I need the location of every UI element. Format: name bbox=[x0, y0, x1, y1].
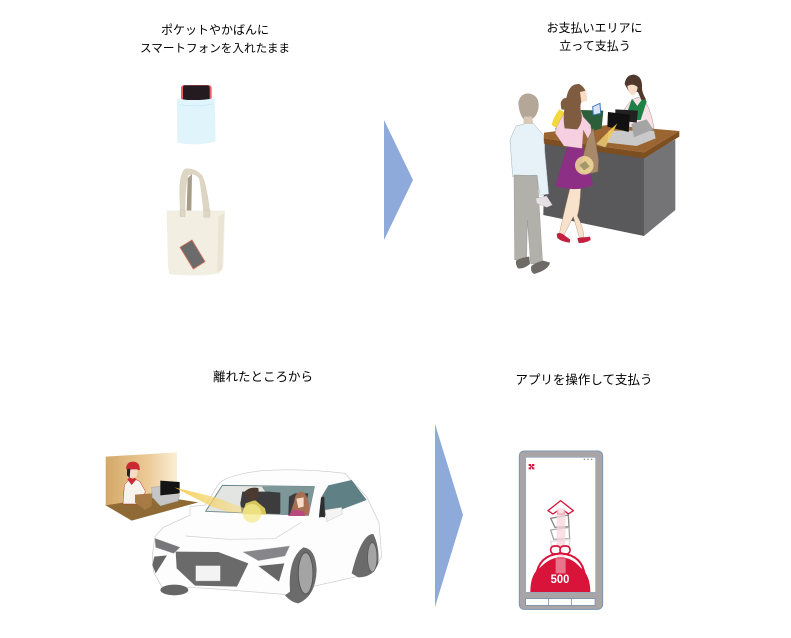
illustration: drive-through scene with car bbox=[106, 452, 382, 603]
icon: tote bag with smartphone bbox=[167, 169, 225, 275]
status dots bbox=[584, 459, 592, 460]
kiosk wall and counter bbox=[106, 452, 198, 521]
app logo bbox=[529, 464, 534, 469]
heading: pocket or bag bbox=[140, 23, 290, 55]
phone body bbox=[519, 451, 603, 609]
plants/goods bbox=[581, 110, 603, 131]
staff member bbox=[123, 462, 152, 510]
heading: from a distance: 離れたところから bbox=[213, 370, 313, 384]
heading: operate app to pay: アプリを操作して支払う bbox=[515, 372, 653, 387]
hand swipe trail bbox=[551, 508, 570, 572]
driver bbox=[242, 488, 266, 523]
bottom navigation bbox=[526, 599, 595, 605]
screen bbox=[526, 457, 596, 592]
coin purse: 500 bbox=[551, 572, 570, 586]
register and reader bbox=[152, 481, 180, 506]
man from behind bbox=[510, 93, 552, 274]
heading: stand in payment area: 立って支払う bbox=[559, 39, 631, 53]
shoulder bag and glowing phone bbox=[575, 128, 599, 175]
arrow: bottom bbox=[435, 424, 463, 607]
card reader and register bbox=[607, 109, 656, 146]
cashier bbox=[624, 75, 654, 128]
swipe arrow bbox=[548, 501, 573, 514]
light beam bbox=[596, 123, 617, 147]
coin purse bbox=[530, 546, 590, 592]
car body bbox=[152, 470, 382, 603]
arrow: top bbox=[384, 120, 413, 240]
counter bbox=[543, 125, 679, 236]
heading: stand in payment area bbox=[546, 21, 643, 53]
light beam bbox=[174, 487, 262, 515]
woman bbox=[552, 84, 601, 243]
icon: smartphone in shirt pocket bbox=[177, 85, 216, 144]
heading: stand in payment area: お支払いエリアに bbox=[546, 21, 643, 35]
passenger bbox=[288, 492, 309, 516]
illustration: smartphone app screen bbox=[519, 451, 603, 609]
heading: pocket or bag: ポケットやかばんに bbox=[161, 23, 269, 37]
heading: pocket or bag: スマートフォンを入れたまま bbox=[140, 42, 290, 55]
illustration: counter checkout scene bbox=[510, 75, 679, 274]
